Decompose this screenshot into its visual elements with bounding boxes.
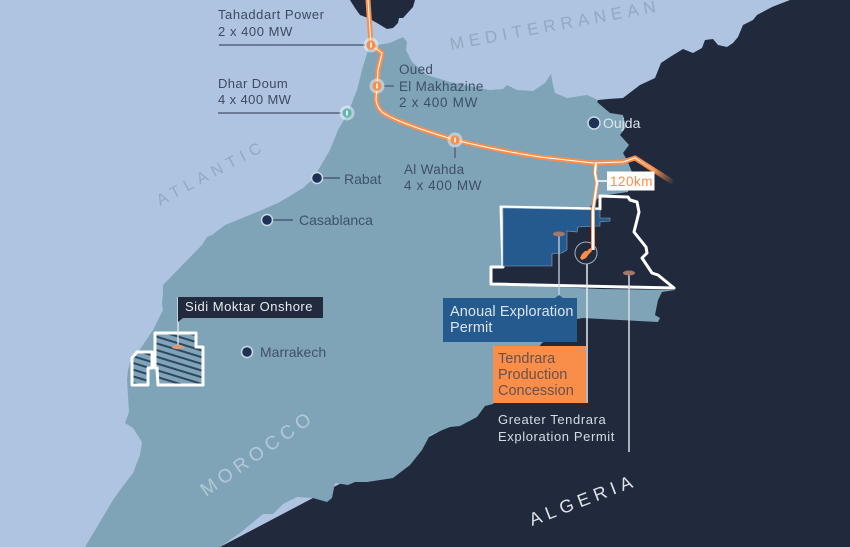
label: 120km <box>597 172 654 190</box>
node: Tahaddart Power <box>364 38 378 52</box>
icon: Tendrara field circle <box>575 242 597 264</box>
leader lines for power stations <box>218 45 455 158</box>
label: Oued El Makhazine: El Makhazine <box>399 79 484 94</box>
node: Oued El Makhazine <box>370 78 384 94</box>
callout: Tendrara Production Concession: Concession <box>498 383 574 399</box>
callout: Anoual Exploration Permit: Permit <box>450 320 492 336</box>
landmass: Morocco <box>85 37 675 547</box>
landmass: Algeria <box>220 0 850 547</box>
block: Sidi Moktar Onshore permit <box>132 333 203 385</box>
label: Tahaddart Power: Tahaddart Power <box>218 7 325 22</box>
label: Al Wahda: 4 x 400 MW <box>404 178 482 193</box>
callout: Anoual Exploration Permit: Anoual Exploration <box>450 304 574 320</box>
city: Casablanca: Casablanca <box>299 212 373 228</box>
label: Tahaddart Power: 2 x 400 MW <box>218 24 293 39</box>
marker: Greater Tendrara <box>623 270 635 276</box>
landmass: Spain <box>350 0 415 29</box>
label: Greater Tendrara Exploration Permit: Greater Tendrara <box>498 412 607 427</box>
pipeline: main route <box>368 0 674 183</box>
label: Greater Tendrara Exploration Permit: Exploration Permit <box>498 429 615 444</box>
callout: Anoual Exploration Permit <box>443 295 577 342</box>
callout: Tendrara Production Concession <box>493 346 586 403</box>
city: Marrakech: Marrakech <box>260 344 326 360</box>
marker line: Anoual <box>558 234 560 297</box>
city: Rabat <box>312 171 381 187</box>
marker line: Greater Tendrara <box>628 273 630 452</box>
label: Dhar Doum: 4 x 400 MW <box>218 92 292 107</box>
callout: Sidi Moktar Onshore <box>172 297 323 349</box>
country label: Morocco: MOROCCO <box>197 409 315 501</box>
node: Dhar Doum <box>340 106 354 120</box>
city: Oujda: Oujda <box>603 115 641 131</box>
block: Greater Tendrara Exploration Permit <box>491 196 674 288</box>
city: Rabat: Rabat <box>344 171 381 187</box>
callout: Sidi Moktar Onshore: Sidi Moktar Onshore <box>185 299 313 314</box>
label: Al Wahda: Al Wahda <box>404 162 465 177</box>
callout: Tendrara Production Concession: Production <box>498 367 567 383</box>
block: Anoual Exploration Permit <box>503 208 610 266</box>
city: Casablanca <box>262 212 373 228</box>
pipeline: branch to Tendrara <box>593 163 597 250</box>
marker line: Tendrara <box>586 264 588 403</box>
marker: Anoual <box>553 232 565 236</box>
country label: Algeria: ALGERIA <box>526 472 635 530</box>
node: Al Wahda <box>448 132 462 148</box>
sea label: Atlantic: ATLANTIC <box>154 140 264 210</box>
label: 120km: 120km <box>610 174 653 189</box>
label: Oued El Makhazine: Oued <box>399 62 433 77</box>
callout: Tendrara Production Concession: Tendrara <box>498 351 556 367</box>
label: Oued El Makhazine: 2 x 400 MW <box>399 95 478 110</box>
label: Dhar Doum: Dhar Doum <box>218 76 288 91</box>
